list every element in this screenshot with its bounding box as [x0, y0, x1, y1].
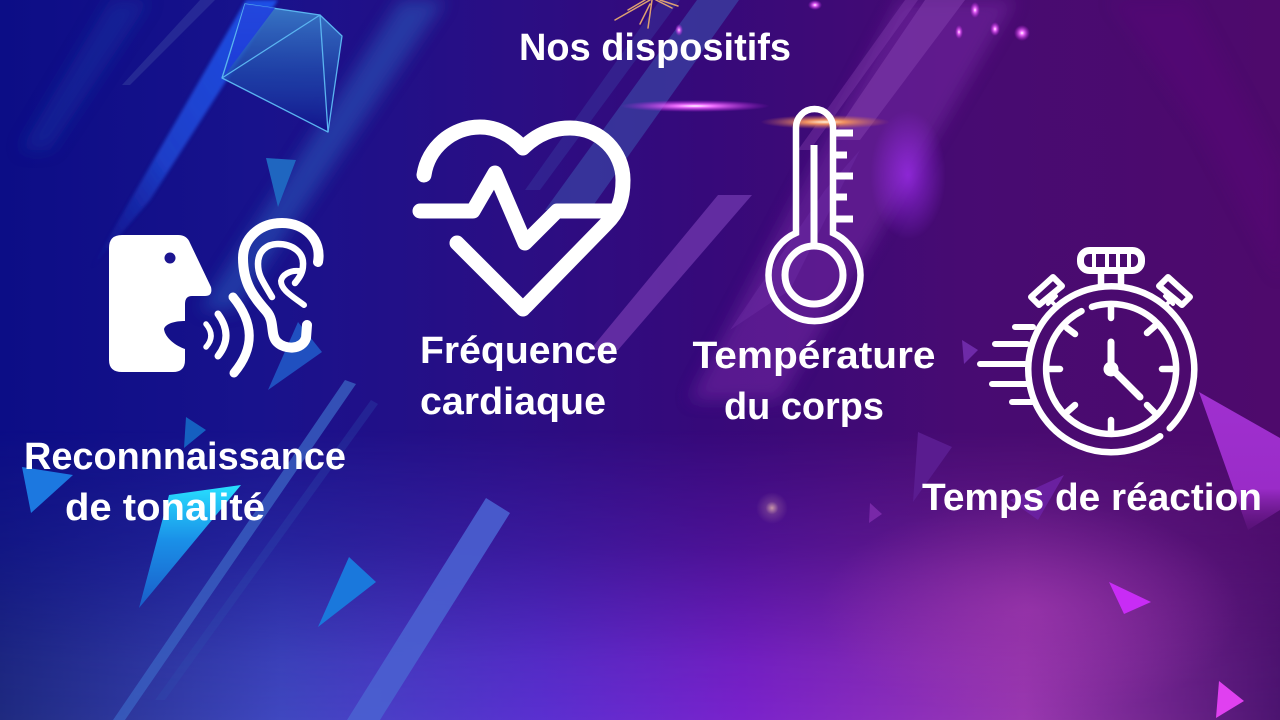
- label: heart rate: [420, 330, 618, 423]
- label: body temperature: [692, 335, 936, 428]
- label: heart rate: cardiaque: [420, 381, 606, 423]
- label: tone recognition: Reconnnaissance: [24, 436, 346, 478]
- label: tone recognition: de tonalité: [65, 487, 265, 529]
- label: body temperature: Température: [692, 335, 936, 377]
- label: tone recognition: [24, 436, 346, 529]
- label: reaction time: Temps de réaction: [922, 477, 1262, 519]
- icon: speaking head and ear: [109, 223, 319, 373]
- title: Nos dispositifs: [519, 27, 791, 69]
- icon: stopwatch: [980, 250, 1194, 452]
- label: body temperature: du corps: [724, 386, 884, 428]
- decorative triangles: [22, 158, 1244, 718]
- icon: heart rate: [420, 127, 623, 309]
- label: heart rate: Fréquence: [420, 330, 618, 372]
- icon: thermometer: [768, 109, 861, 321]
- fireworks: [615, 0, 683, 36]
- gem outline: [222, 4, 342, 132]
